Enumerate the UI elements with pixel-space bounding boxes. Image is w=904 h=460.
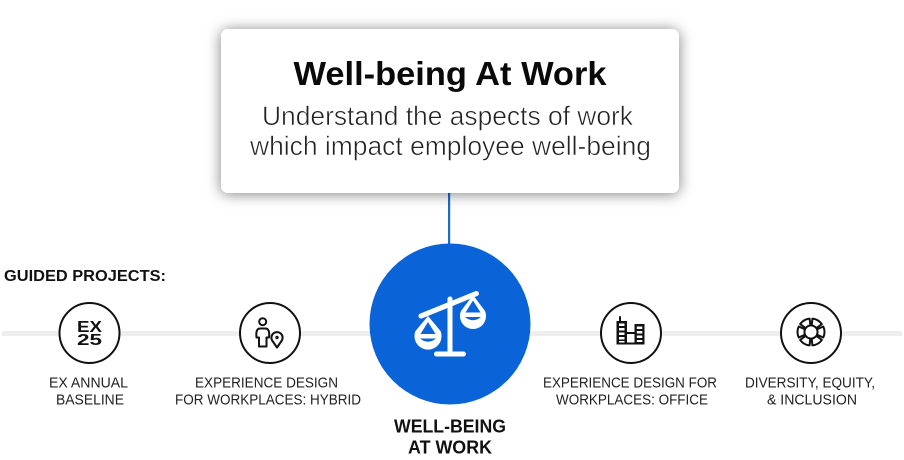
label: EXPERIENCE DESIGN: [195, 376, 338, 392]
icon: segmented wheel: [794, 316, 828, 348]
subtitle: Understand the aspects of work: [262, 101, 633, 131]
node: EX annual baseline: [49, 303, 128, 408]
icon: EX25: [77, 319, 103, 349]
icon: EX25: EX: [77, 319, 103, 336]
label: well-being at work: AT WORK: [408, 438, 492, 458]
icon: EX25: 25: [77, 332, 103, 349]
icon: person and location pin: [256, 318, 283, 348]
panel: title card: [221, 29, 679, 193]
icon: balance scale: [414, 294, 486, 354]
label: BASELINE: [56, 392, 124, 408]
label: well-being at work: WELL-BEING: [394, 416, 506, 436]
subtitle: which impact employee well-being: [249, 131, 651, 161]
node: diversity, equity and inclusion: [745, 303, 875, 408]
timeline track: [2, 331, 902, 336]
node: experience design office: [543, 303, 717, 408]
connector line: [448, 192, 450, 248]
label: WORKPLACES: OFFICE: [556, 392, 708, 408]
icon: office buildings: [616, 317, 644, 344]
central node: well-being at work: [370, 244, 530, 404]
node: experience design hybrid: [175, 303, 361, 408]
label: FOR WORKPLACES: HYBRID: [175, 392, 361, 408]
section label: guided projects: GUIDED PROJECTS:: [4, 268, 166, 285]
label: DIVERSITY, EQUITY,: [745, 376, 875, 392]
label: EXPERIENCE DESIGN FOR: [543, 376, 717, 392]
label: EX ANNUAL: [49, 376, 128, 392]
subtitle: [249, 101, 651, 161]
label: & INCLUSION: [767, 392, 857, 408]
heading: Well-being At Work: [294, 55, 607, 92]
